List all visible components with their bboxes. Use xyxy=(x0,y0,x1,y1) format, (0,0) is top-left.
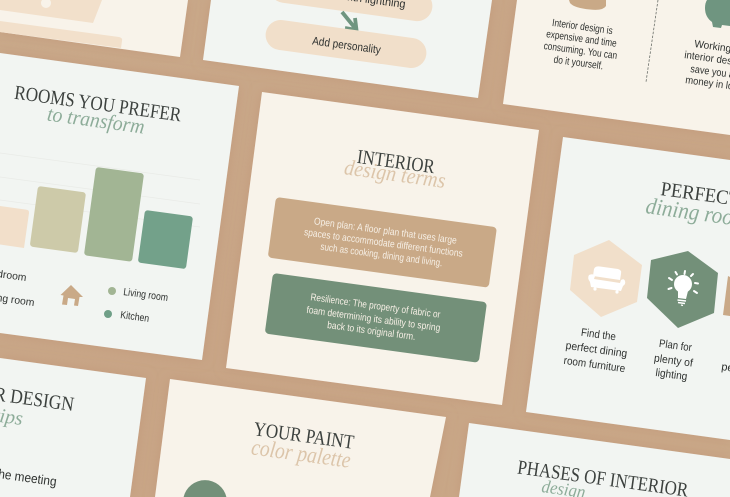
script subheading: color palette: color palette xyxy=(250,434,352,473)
icon: light bulb xyxy=(668,271,698,306)
text: do it yourself argument: do it yourself. xyxy=(553,55,604,72)
definition box: resilience: back to its original form. xyxy=(327,320,416,343)
text: do it yourself argument: expensive and time xyxy=(545,29,617,50)
peach image block xyxy=(0,0,102,23)
bar: dining room xyxy=(30,186,86,253)
text: find furniture: perfect dining xyxy=(565,340,628,360)
pill: lightning step xyxy=(268,0,434,23)
legend label: kitchen: Kitchen xyxy=(120,310,150,325)
text: do it yourself argument: Interior design is xyxy=(551,18,613,37)
definition box: open plan: Open plan: A floor plan that uses large xyxy=(313,216,458,247)
panel: top-middle slide xyxy=(203,0,492,98)
pill: add personality xyxy=(264,18,428,70)
icon: house xyxy=(60,285,83,306)
heading: your paint: YOUR PAINT xyxy=(252,418,355,454)
legend dot: living room xyxy=(108,287,116,295)
legend dot: kitchen xyxy=(104,310,112,318)
panel: interior design terms slide xyxy=(226,92,539,405)
panel: your paint color palette slide xyxy=(155,379,446,497)
text: find furniture xyxy=(563,327,628,375)
script subheading: design terms: design terms xyxy=(343,154,447,193)
icon: sofa xyxy=(588,266,625,294)
heading: rooms you prefer: ROOMS YOU PREFER xyxy=(13,82,183,126)
definition box: resilience: foam determining its ability to spring xyxy=(306,305,441,334)
arrow down to next step xyxy=(342,12,356,30)
icon: green piggy bank xyxy=(705,0,730,28)
cream dot xyxy=(41,0,51,8)
dashed divider xyxy=(646,0,658,82)
step label: add personality: Add personality xyxy=(311,35,382,57)
hexagon: personality xyxy=(723,276,730,316)
text: plan lighting: lighting xyxy=(655,367,688,383)
bar: kitchen xyxy=(138,210,193,269)
panel: rooms you prefer slide xyxy=(0,53,239,360)
panel: phases of interior design slide xyxy=(459,423,730,497)
text: plan lighting: Plan for xyxy=(658,338,693,354)
text: find furniture: room furniture xyxy=(563,355,626,375)
definition box: open plan xyxy=(268,197,497,288)
legend label: living room: Living room xyxy=(123,287,169,304)
definition box: open plan: spaces to accommodate different functions xyxy=(303,227,463,260)
definition box: resilience xyxy=(265,273,487,363)
bar chart xyxy=(0,167,193,269)
text: do it yourself argument xyxy=(543,18,618,72)
palette swatch circle xyxy=(184,480,226,497)
definition box: resilience: Resilience: The property of fabric or xyxy=(310,292,442,321)
bar: living room xyxy=(84,167,144,262)
panel: top-left slide xyxy=(0,0,188,57)
panel: top-right slide xyxy=(503,0,730,135)
peach bar xyxy=(0,21,122,48)
definition box: open plan: such as cooking, dining and living. xyxy=(320,242,443,269)
panel: interior design tips slide xyxy=(0,358,146,497)
script subheading: to transform: to transform xyxy=(46,102,146,139)
text: hire a designer argument xyxy=(684,39,730,97)
bar: bedroom xyxy=(0,206,29,248)
text: find furniture: Find the xyxy=(580,327,617,343)
icon: brown piggy bank xyxy=(569,0,606,10)
text: plan lighting: plenty of xyxy=(653,352,694,370)
heading: interior: INTERIOR xyxy=(356,146,436,178)
text: do it yourself argument: consuming. You can xyxy=(543,41,618,62)
panel: perfect dining room slide xyxy=(526,137,730,440)
hexagon: furniture xyxy=(570,240,642,317)
text: plan lighting xyxy=(653,338,694,383)
hexagon: lighting xyxy=(647,251,718,328)
